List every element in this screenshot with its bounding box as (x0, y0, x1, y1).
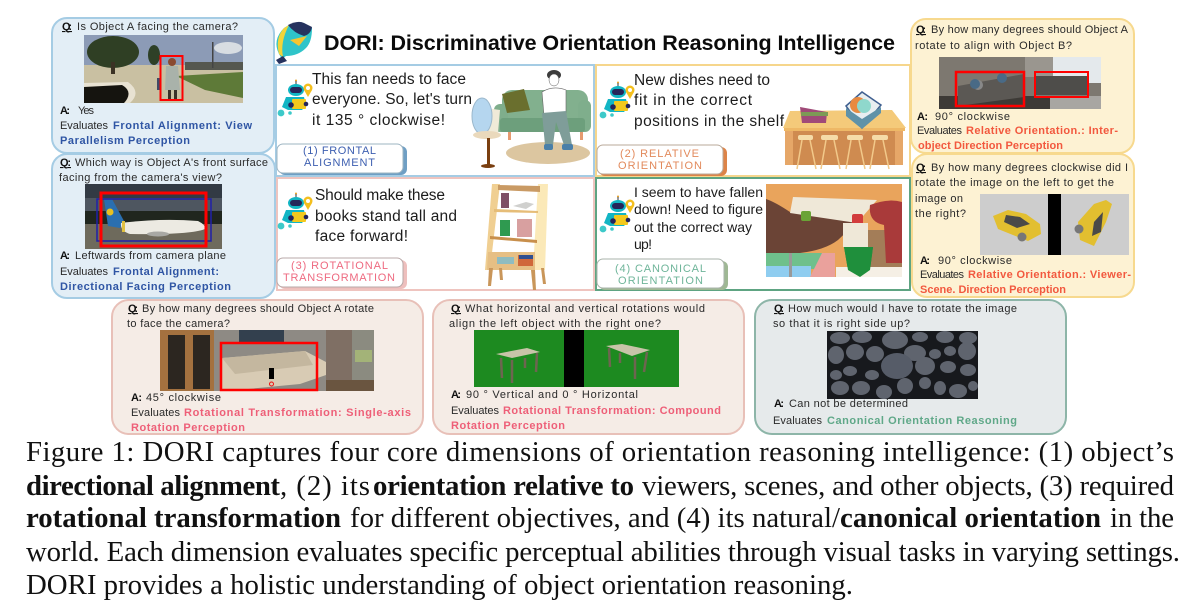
evaluation text: Relative Orientation.: Viewer- (968, 269, 1131, 281)
illustration: bookshelf (485, 184, 548, 290)
scenario text (315, 187, 457, 245)
scenario text: New dishes need to (634, 72, 770, 89)
answer: Yes (78, 105, 94, 117)
category label: (3) ROTATIONAL (291, 260, 388, 272)
icon: tropical fish mascot (276, 22, 312, 64)
illustration: man on sofa with fan (472, 70, 591, 168)
figure caption: for different objectives, and (4) its natural/ (350, 502, 840, 534)
scenario text: fit in the correct (634, 92, 753, 109)
scenario text: This fan needs to face (312, 71, 466, 88)
question: Q: (60, 157, 71, 169)
figure caption: rotational transformation (26, 502, 341, 534)
category label: (2) RELATIVE (620, 148, 699, 160)
panel: rotational transformation single-axis example (112, 300, 423, 434)
question: rotate to align with Object B? (915, 40, 1072, 52)
evaluation text: Rotation Perception (451, 420, 565, 432)
question (127, 303, 374, 330)
evaluation text: Rotational Transformation: Single-axis (184, 407, 411, 419)
scenario text: positions in the shelf (634, 113, 785, 130)
illustration: kitchen island with dish rack (783, 92, 906, 169)
evaluation text (131, 407, 411, 434)
icon: robot (600, 196, 634, 232)
category label: (4) CANONICAL (615, 263, 706, 275)
panel: frontal alignment directional facing example (52, 154, 275, 298)
scenario text: up! (634, 236, 652, 252)
photo: airplane on runway (85, 184, 222, 249)
answer: A: (60, 105, 70, 117)
evaluation text: Canonical Orientation Reasoning (827, 415, 1017, 427)
panel: canonical orientation example (755, 300, 1066, 434)
evaluation text: Evaluates (773, 415, 822, 427)
scenario text (312, 71, 472, 129)
figure caption: viewers, scenes, and other objects, (3) required (642, 470, 1175, 502)
evaluation text: Scene. Direction Perception (920, 284, 1066, 296)
answer: A: (451, 389, 461, 401)
figure caption: Figure 1: DORI captures four core dimensions of orientation reasoning intelligence: (1) object’s (26, 436, 1174, 468)
evaluation text: Parallelism Perception (60, 135, 190, 147)
photo: yellow toy car rotated (980, 194, 1129, 255)
category label: ORIENTATION (618, 275, 703, 287)
category label (597, 145, 727, 176)
answer: A: (917, 111, 928, 123)
question: Q: (62, 21, 72, 33)
question (449, 303, 705, 330)
photo: rotated table on green background (474, 330, 679, 387)
evaluation text: Frontal Alignment: View (113, 120, 252, 132)
question: facing from the camera's view? (59, 172, 222, 184)
panel: frontal alignment scenario (276, 65, 594, 176)
category label: (1) FRONTAL (303, 145, 376, 157)
answer: 45° clockwise (146, 392, 221, 404)
figure caption: DORI provides a holistic understanding of object orientation reasoning. (26, 569, 853, 601)
panel: relative orientation inter-object example (911, 19, 1134, 153)
figure caption: directional alignment (26, 470, 280, 502)
photo: pile of rocks (827, 331, 978, 399)
panel: relative orientation scenario (596, 65, 910, 176)
answer: 90 ° Vertical and 0 ° Horizontal (466, 389, 638, 401)
scenario text: face forward! (315, 228, 408, 245)
answer: A: (60, 250, 70, 262)
question: to face the camera? (127, 318, 230, 330)
scenario text: Should make these (315, 187, 445, 204)
scenario text: it 135 ° clockwise! (312, 112, 445, 129)
category label (597, 259, 728, 290)
category label: TRANSFORMATION (283, 272, 395, 284)
question: By how many degrees should Object A (931, 24, 1129, 36)
question: rotate the image on the left to get the (915, 177, 1114, 189)
question: image on (915, 193, 963, 205)
figure caption: orientation relative to (373, 470, 634, 502)
answer: A: (774, 398, 784, 410)
figure caption: canonical orientation (840, 502, 1101, 534)
question: so that it is right side up? (773, 318, 910, 330)
question: Which way is Object A's front surface (75, 157, 268, 169)
evaluation text: Evaluates (60, 120, 108, 132)
category label: ALIGNMENT (304, 157, 375, 169)
panel: relative orientation viewer-scene example (912, 154, 1134, 297)
category label (277, 258, 407, 289)
evaluation text: Relative Orientation.: Inter- (966, 125, 1118, 137)
figure caption: , (2) its (280, 470, 370, 502)
panel: canonical orientation scenario (596, 178, 910, 290)
question: Is Object A facing the camera? (77, 21, 238, 33)
question (773, 303, 1017, 330)
panel: rotational transformation compound example (433, 300, 744, 434)
evaluation text: Directional Facing Perception (60, 281, 231, 293)
photo: beige sofa in living room (160, 330, 374, 391)
answer: 90° clockwise (938, 255, 1012, 267)
evaluation text: Rotation Perception (131, 422, 245, 434)
answer: A: (920, 255, 930, 267)
icon: robot (600, 82, 634, 118)
question: the right? (915, 208, 966, 220)
figure caption (26, 436, 1180, 601)
figure caption: in the (1110, 502, 1174, 534)
question: By how many degrees clockwise did I (931, 162, 1128, 174)
category label (277, 144, 407, 175)
evaluation text: object Direction Perception (918, 140, 1063, 152)
panel: frontal alignment view parallelism example (52, 18, 274, 153)
evaluation text (60, 120, 252, 147)
evaluation text: Evaluates (917, 125, 962, 137)
evaluation text: Evaluates (60, 266, 108, 278)
illustration: upside-down room (766, 184, 902, 277)
question (915, 162, 1128, 220)
scenario text: I seem to have fallen (634, 184, 763, 200)
question: Q: (128, 303, 138, 315)
title: DORI: Discriminative Orientation Reasoning Intelligence (324, 31, 895, 55)
question: How much would I have to rotate the image (788, 303, 1017, 315)
answer: 90° clockwise (935, 111, 1010, 123)
question: Q: (774, 303, 784, 315)
answer: A: (131, 392, 142, 404)
question: align the left object with the right one? (449, 318, 661, 330)
answer: Can not be determined (789, 398, 908, 410)
question (59, 157, 268, 184)
evaluation text (920, 269, 1131, 296)
figure caption: world. Each dimension evaluates specific perceptual abilities through visual tasks in varying settings. (26, 536, 1180, 568)
question: What horizontal and vertical rotations would (465, 303, 705, 315)
answer: Leftwards from camera plane (75, 250, 226, 262)
evaluation text: Evaluates (131, 407, 180, 419)
scenario text (634, 72, 785, 130)
evaluation text: Evaluates (451, 405, 500, 417)
scenario text: everyone. So, let's turn (312, 91, 472, 108)
scenario text: out the correct way (634, 219, 752, 235)
scenario text: down! Need to figure (634, 201, 763, 217)
evaluation text (60, 266, 231, 293)
question (915, 24, 1129, 52)
panel: rotational transformation scenario (277, 178, 594, 290)
evaluation text: Rotational Transformation: Compound (503, 405, 721, 417)
question: Q: (916, 24, 926, 36)
icon: robot (278, 192, 312, 229)
answer (60, 105, 94, 117)
evaluation text: Frontal Alignment: (113, 266, 219, 278)
question: Q: (916, 162, 926, 174)
evaluation text (451, 405, 721, 432)
photo: woman walking by a pond (84, 35, 243, 103)
icon: robot (278, 80, 312, 116)
category label: ORIENTATION (618, 160, 702, 172)
question: Q: (451, 303, 461, 315)
question: By how many degrees should Object A rotate (142, 303, 374, 315)
evaluation text: Evaluates (920, 269, 964, 281)
photo: two grey sofas (939, 57, 1101, 109)
scenario text: books stand tall and (315, 208, 457, 225)
evaluation text (917, 125, 1118, 152)
scenario text (634, 184, 763, 252)
